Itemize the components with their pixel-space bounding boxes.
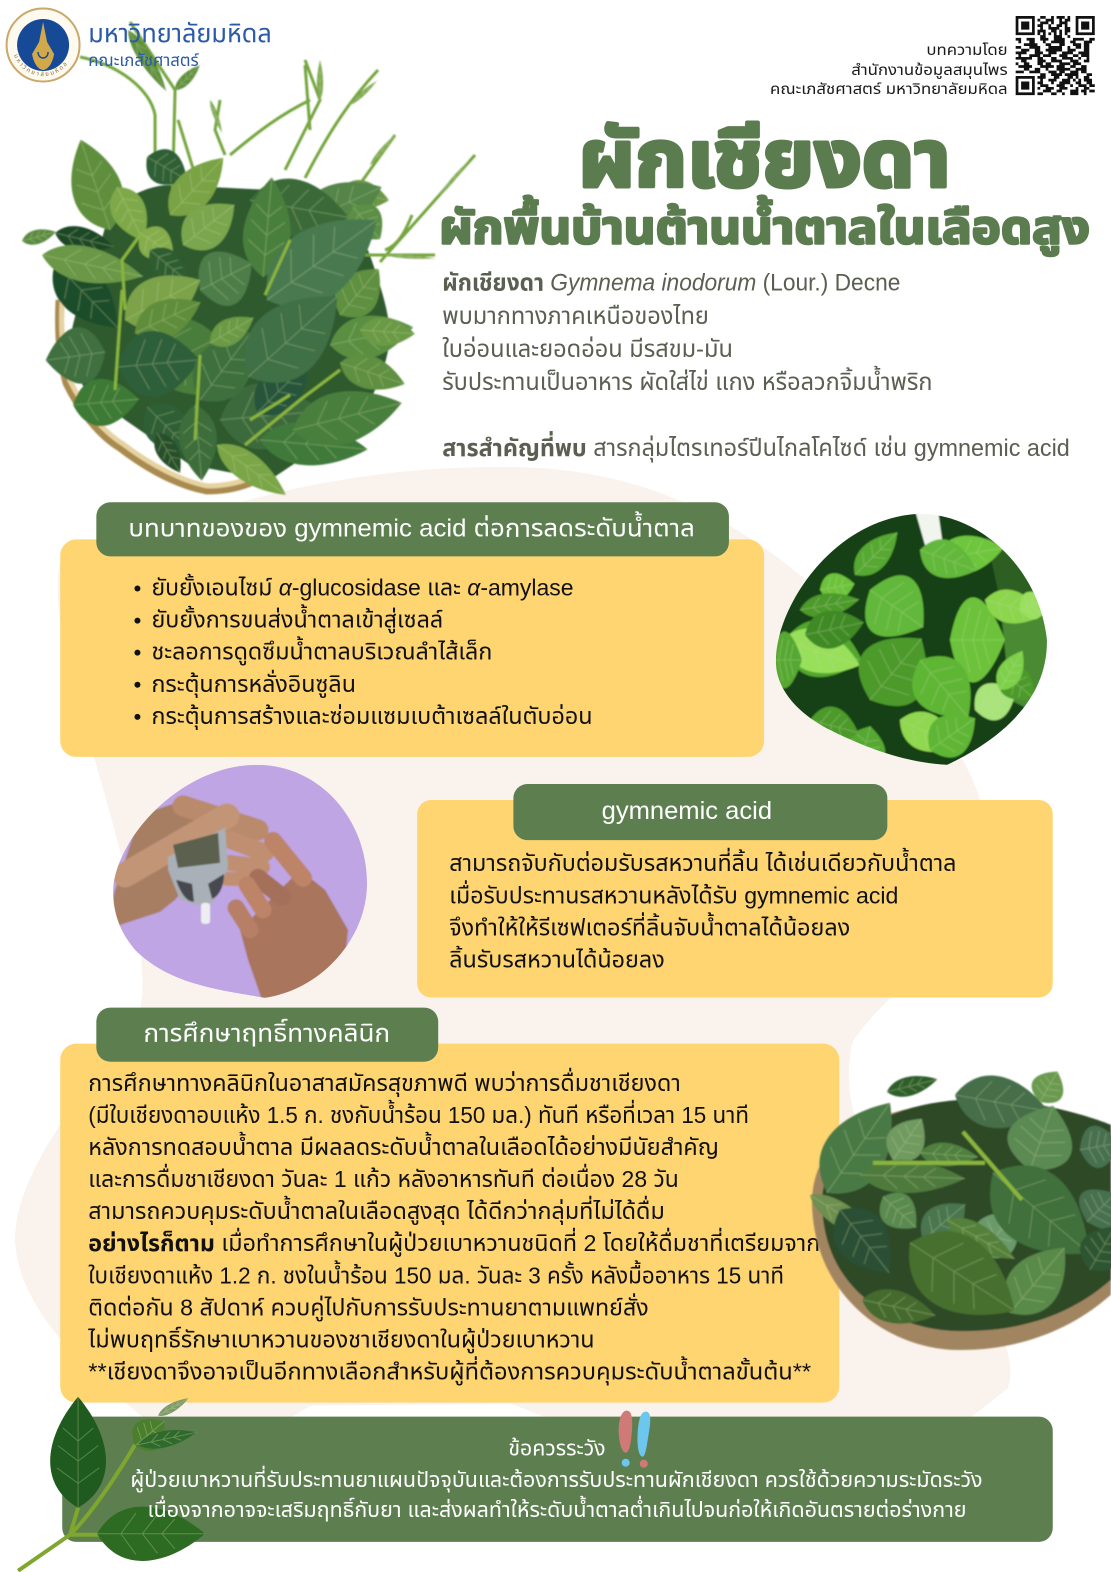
heading: gymnemic acid bbox=[513, 784, 887, 840]
bullet list bbox=[134, 573, 593, 730]
clinical study text: ใบเชียงดาแห้ง 1.2 ก. ชงในน้ำร้อน 150 มล. วันละ 3 ครั้ง หลังมื้ออาหาร 15 นาที bbox=[88, 1259, 784, 1288]
gymnemic acid text bbox=[449, 847, 957, 972]
bullet list: ชะลอการดูดซึมน้ำตาลบริเวณลำไส้เล็ก bbox=[151, 636, 492, 667]
QR code bbox=[1016, 16, 1095, 95]
panel: gymnemic acid bbox=[417, 784, 1053, 998]
intro text: สารสำคัญที่พบ สารกลุ่มไตรเทอร์ปีนไกลโคไซด์ เช่น gymnemic acid bbox=[442, 431, 1070, 463]
heading: clinical study: การศึกษาฤทธิ์ทางคลินิก bbox=[143, 1018, 390, 1048]
intro text bbox=[442, 270, 1070, 463]
caution heading: ข้อควรระวัง bbox=[508, 1437, 606, 1461]
caution text bbox=[130, 1465, 983, 1522]
clinical study text: สามารถควบคุมระดับน้ำตาลในเลือดสูงสุด ได้ดีกว่ากลุ่มที่ไม่ได้ดื่ม bbox=[88, 1195, 665, 1226]
clinical study text: ติดต่อกัน 8 สัปดาห์ ควบคู่ไปกับการรับประทานยาตามแพทย์สั่ง bbox=[88, 1293, 649, 1322]
logo text: Mahidol University: มหาวิทยาลัยมหิดล bbox=[88, 18, 272, 48]
clinical study text: การศึกษาทางคลินิกในอาสาสมัครสุขภาพดี พบว่าการดื่มชาเชียงดา bbox=[88, 1067, 681, 1097]
logo text: Mahidol University: คณะเภสัชศาสตร์ bbox=[88, 51, 199, 70]
credit text bbox=[770, 42, 1008, 98]
clinical study text: **เชียงดาจึงอาจเป็นอีกทางเลือกสำหรับผู้ที่ต้องการควบคุมระดับน้ำตาลขั้นต้น** bbox=[88, 1356, 811, 1387]
credit text: สำนักงานข้อมูลสมุนไพร bbox=[851, 62, 1008, 79]
panel: caution bbox=[18, 1395, 1053, 1571]
gymnemic acid text: ลิ้นรับรสหวานได้น้อยลง bbox=[449, 945, 665, 972]
bullet list: ยับยั้งเอนไซม์ α-glucosidase และ α-amylase bbox=[151, 573, 574, 601]
logo: Mahidol University seal bbox=[6, 8, 81, 82]
heading: gymnemic acid: gymnemic acid bbox=[602, 797, 772, 825]
title: ผักเชียงดา bbox=[579, 113, 951, 203]
photo: glucose meter in hands bbox=[113, 765, 367, 998]
credit text: บทความโดย bbox=[926, 42, 1008, 59]
heading: clinical study bbox=[96, 1008, 438, 1062]
credit text: คณะเภสัชศาสตร์ มหาวิทยาลัยมหิดล bbox=[770, 81, 1008, 98]
icon: exclamation marks bbox=[619, 1411, 650, 1468]
photo: chiang da leaves on bamboo plate bbox=[20, 22, 475, 506]
intro text: รับประทานเป็นอาหาร ผัดใส่ไข่ แกง หรือลวกจิ้มน้ำพริก bbox=[442, 365, 932, 396]
photo: chiang da vine bbox=[770, 510, 1055, 770]
photo: basket of leaves bbox=[802, 1063, 1111, 1350]
clinical study text bbox=[87, 1067, 820, 1387]
bullet list: กระตุ้นการหลั่งอินซูลิน bbox=[151, 669, 356, 699]
clinical study text: หลังการทดสอบน้ำตาล มีผลลดระดับน้ำตาลในเลือดได้อย่างมีนัยสำคัญ bbox=[88, 1131, 719, 1160]
clinical study text: ไม่พบฤทธิ์รักษาเบาหวานของชาเชียงดาในผู้ป่วยเบาหวาน bbox=[87, 1326, 595, 1354]
gymnemic acid text: จึงทำให้ให้รีเซฟเตอร์ที่ลิ้นจับน้ำตาลได้น้อยลง bbox=[449, 911, 850, 940]
caution text: ผู้ป่วยเบาหวานที่รับประทานยาแผนปัจจุบันและต้องการรับประทานผักเชียงดา ควรใช้ด้วยความระมัดระวัง bbox=[130, 1465, 983, 1493]
gymnemic acid text: เมื่อรับประทานรสหวานหลังได้รับ gymnemic acid bbox=[449, 879, 898, 908]
heading: role of gymnemic acid: บทบาทของของ gymnemic acid ต่อการลดระดับน้ำตาล bbox=[128, 510, 695, 542]
panel: role of gymnemic acid bbox=[60, 502, 764, 757]
intro text: พบมากทางภาคเหนือของไทย bbox=[442, 303, 709, 330]
heading: role of gymnemic acid bbox=[96, 502, 729, 556]
panel: clinical study bbox=[60, 1008, 839, 1403]
bullet list: ยับยั้งการขนส่งน้ำตาลเข้าสู่เซลล์ bbox=[151, 604, 443, 635]
logo text: Mahidol University bbox=[88, 18, 272, 70]
clinical study text: และการดื่มชาเชียงดา วันละ 1 แก้ว หลังอาหารทันที ต่อเนื่อง 28 วัน bbox=[88, 1163, 679, 1192]
caution text: เนื่องจากอาจจะเสริมฤทธิ์กับยา และส่งผลทำให้ระดับน้ำตาลต่ำเกินไปจนก่อให้เกิดอันตรายต่อร่างกาย bbox=[147, 1495, 967, 1522]
clinical study text: (มีใบเชียงดาอบแห้ง 1.5 ก. ชงกับน้ำร้อน 150 มล.) ทันที หรือที่เวลา 15 นาที bbox=[88, 1099, 749, 1128]
bullet list: กระตุ้นการสร้างและซ่อมแซมเบต้าเซลล์ในตับอ่อน bbox=[151, 703, 593, 730]
gymnemic acid text: สามารถจับกับต่อมรับรสหวานที่ลิ้น ได้เช่นเดียวกับน้ำตาล bbox=[449, 847, 957, 876]
intro text: ผักเชียงดา Gymnema inodorum (Lour.) Decne bbox=[442, 270, 900, 297]
logo: Mahidol University seal: มหาวิทยาลัยมหิดล bbox=[14, 54, 67, 76]
photo: leaf sprig bbox=[18, 1395, 205, 1571]
clinical study text: อย่างไรก็ตาม เมื่อทำการศึกษาในผู้ป่วยเบาหวานชนิดที่ 2 โดยให้ดื่มชาที่เตรียมจาก bbox=[88, 1227, 820, 1258]
background blob bbox=[15, 467, 1010, 1424]
intro text: ใบอ่อนและยอดอ่อน มีรสขม-มัน bbox=[442, 335, 733, 363]
subtitle: ผักพื้นบ้านต้านน้ำตาลในเลือดสูง bbox=[439, 196, 1090, 256]
